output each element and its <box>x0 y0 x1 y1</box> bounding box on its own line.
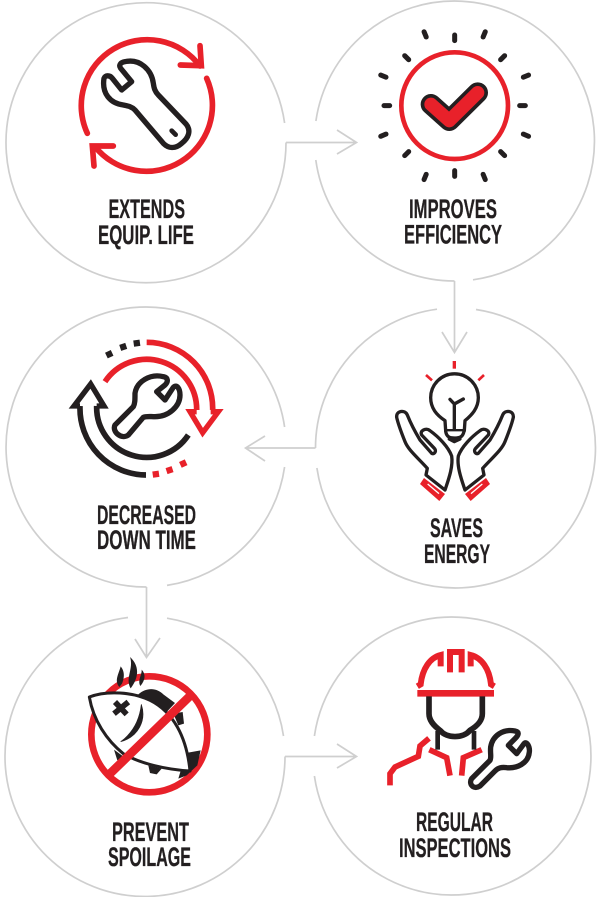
label: ENERGY <box>424 539 490 569</box>
label: EQUIP. LIFE <box>98 220 194 250</box>
label: EFFICIENCY <box>404 220 502 250</box>
label: SPOILAGE <box>108 842 191 872</box>
arrow: fourth to fifth step <box>135 587 160 658</box>
icon: spoiled fish in prohibition sign <box>89 657 207 792</box>
arrow: second to third step <box>442 281 467 352</box>
label: SAVES <box>430 513 483 543</box>
label: INSPECTIONS <box>399 833 511 863</box>
label <box>97 500 196 555</box>
arrow: fifth to sixth step <box>285 744 356 768</box>
panel: extends equipment life <box>6 3 286 283</box>
label <box>399 807 511 863</box>
arrow: third to fourth step <box>246 436 316 461</box>
label: DECREASED <box>97 500 196 530</box>
icon: wrench inside circular arrows <box>74 340 218 478</box>
label <box>108 817 191 872</box>
panel: prevent spoilage <box>5 618 285 896</box>
panel: decreased down time <box>6 307 285 587</box>
label: EXTENDS <box>108 194 185 224</box>
icon: light bulb held by two hands <box>397 361 513 501</box>
arrow: first to second step <box>286 130 356 154</box>
circle outline <box>314 617 591 895</box>
label <box>98 194 194 250</box>
label: DOWN TIME <box>97 525 196 555</box>
label: IMPROVES <box>409 194 497 224</box>
circle outline <box>5 618 285 896</box>
icon: worker in hard hat with wrench <box>390 652 529 787</box>
panel: regular inspections <box>314 617 591 895</box>
label: PREVENT <box>112 817 189 847</box>
circle outline <box>316 1 594 281</box>
circle outline <box>6 307 285 587</box>
panel: improves efficiency <box>316 1 594 281</box>
circle outline <box>316 309 595 588</box>
icon: wrench with red cycle arrows <box>81 40 212 171</box>
label <box>404 194 502 250</box>
label: REGULAR <box>416 807 493 837</box>
label <box>424 513 490 569</box>
panel: saves energy <box>316 309 595 588</box>
circle outline <box>6 3 286 283</box>
icon: check mark in radiating circle <box>381 32 529 180</box>
